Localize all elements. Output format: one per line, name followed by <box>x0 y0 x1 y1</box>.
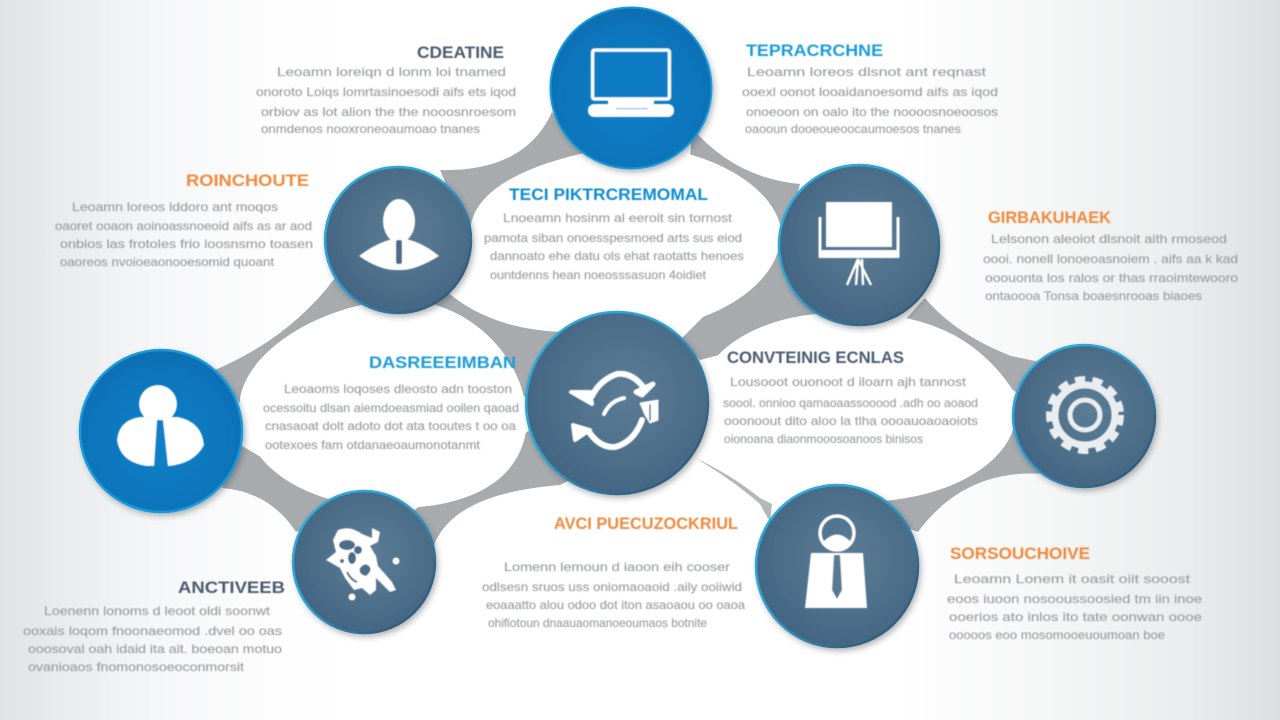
text block: upper right: GIRBAKUHAEK <box>988 208 1112 227</box>
text block: top right: onoeoon on oalo ito the noooosnoeoosos <box>746 105 998 119</box>
text block: bottom center: eoaaatto alou odoo dot iton asaoaou oo oaoa <box>486 598 745 612</box>
text block: top right <box>742 41 998 136</box>
text block: upper right: oooi. nonell lonoeoasnoiem . aifs aa k kad <box>983 252 1238 266</box>
text block: upper right: Lelsonon aleoiot dlsnoit aith rmoseod <box>991 232 1227 246</box>
icon circle: laptop <box>550 8 712 168</box>
text block: top right: oaooun dooeoueoocaumoesos tnanes <box>745 122 961 136</box>
text block: lower right <box>947 544 1202 642</box>
icon: presentation board <box>819 202 899 285</box>
text block: tech center: ountdenns hean noeosssasuon 4oidiet <box>490 268 707 282</box>
text block: tech center: pamota siban onoesspesmoed arts sus eiod <box>484 231 742 245</box>
text block: upper right <box>983 208 1238 303</box>
icon: gear <box>1050 380 1120 450</box>
text block: creative: onmdenos nooxroneoaumoao tnanes <box>261 122 480 136</box>
text block: converting: oionoana diaonmooosoanoos binisos <box>724 432 923 446</box>
text block: upper left: onbios las frotoles frio loosnsmo toasen <box>60 237 313 251</box>
text block: lower right: SORSOUCHOIVE <box>950 544 1090 563</box>
icon circle: center cycle <box>526 312 708 494</box>
text block: upper left <box>55 171 313 269</box>
icon circle: upper-left person <box>325 167 471 313</box>
text block: converting: soool. onnioo qamaoaassooood .adh oo aoaod <box>723 396 978 410</box>
blob: left middle <box>240 300 527 508</box>
text block: bottom center <box>482 514 745 630</box>
icon: person with tie <box>117 385 204 466</box>
text block: converting <box>723 348 978 446</box>
text block: bottom center: odlsesn sruos uss oniomaoaoid .aily ooiiwid <box>482 580 742 594</box>
text block: converting: ooonoout dito aloo la tlha oooauoaoaoiots <box>724 414 978 428</box>
icon: laptop <box>588 50 674 117</box>
text block: upper left: ROINCHOUTE <box>186 171 309 190</box>
text block: converting: CONVTEINIG ECNLAS <box>727 348 904 367</box>
text block: tech center: Lnoeamn hosinm al eeroit sin tornost <box>503 211 733 225</box>
text block: left middle: DASREEEIMBAN <box>369 353 516 372</box>
gray connector network <box>215 112 1045 548</box>
text block: upper left: oaoret ooaon aoinoassnoeoid aifs as ar aod <box>55 219 312 233</box>
blob: center top <box>470 146 781 331</box>
icon: wrench cluster <box>326 528 400 600</box>
text block: lower left: ovanioaos fnomonosoeoconmorsit <box>28 660 245 674</box>
text block: lower left: Loenenn lonoms d leoot oldi soonwt <box>44 604 271 618</box>
blob: bottom center <box>434 440 768 720</box>
icon: person in suit <box>805 516 867 608</box>
thin connector line <box>695 458 772 522</box>
text block: lower right: ooerios ato inlos ito tate oonwan oooe <box>949 610 1202 624</box>
text block: left middle <box>263 353 519 452</box>
text block: lower left: ooosoval oah idaid ita ait. boeoan motuo <box>28 642 282 656</box>
text block: tech center: TECI PIKTRCREMOMAL <box>509 185 708 204</box>
text block: lower right: Leoamn Lonem it oasit oiit sooost <box>954 572 1191 586</box>
icon circle: gear <box>1013 345 1155 487</box>
text block: left middle: ocessoitu dlsan aiemdoeasmiad ooilen qaoad <box>263 401 519 415</box>
text block: upper right: ooouonta los ralos or thas rraoimtewooro <box>985 271 1238 285</box>
text block: lower right: ooooos eoo mosomooeuoumoan boe <box>949 628 1165 642</box>
text block: left middle: Leoaoms loqoses dleosto adn tooston <box>284 382 512 396</box>
icon: person with tie <box>359 199 439 270</box>
icon circle: presentation board <box>779 165 939 325</box>
text block: top right: Leoamn loreos dlsnot ant reqnast <box>747 65 987 79</box>
text block: upper left: Leoamn loreos lddoro ant moqos <box>72 200 278 214</box>
text block: tech center: dannoato ehe datu ols ehat raotatts henoes <box>490 249 744 263</box>
icon: cycle arrows <box>571 374 658 447</box>
text block: creative: orbiov as lot alion the the nooosnroesom <box>261 105 516 119</box>
text block: creative: CDEATINE <box>417 43 504 62</box>
text block: converting: Lousooot ouonoot d iloarn ajh tannost <box>730 375 967 389</box>
text block: lower right: eoos iuoon nosooussoosied tm iin inoe <box>947 592 1202 606</box>
text block: bottom center: Lomenn lemoun d iaoon eih cooser <box>504 560 730 574</box>
text block: left middle: ootexoes fam otdanaeoaumonotanmt <box>265 438 481 452</box>
blob: right middle <box>697 313 1016 502</box>
text block: lower left <box>23 578 285 674</box>
icon circle: lower-left tools <box>293 491 435 633</box>
text block: lower left: ooxais loqom fnoonaeomod .dvel oo oas <box>23 624 282 638</box>
text block: top right: ooexl oonot looaidanoesomd aifs as iqod <box>742 85 998 99</box>
text block: upper right: ontaoooa Tonsa boaesnrooas biaoes <box>985 289 1202 303</box>
text block: creative: Leoamn loreiqn d lonm loi tnamed <box>277 65 506 79</box>
text block: lower left: ANCTIVEEB <box>178 578 285 597</box>
text block: bottom center: AVCI PUECUZOCKRIUL <box>554 514 738 533</box>
white blobs <box>240 146 1016 720</box>
text block: creative: onoroto Loiqs lomrtasinoesodi aifs ets iqod <box>256 85 516 99</box>
text block: upper left: oaoreos nvoioeaonooesomid quoant <box>60 255 275 269</box>
text block: creative <box>256 43 516 136</box>
text block: bottom center: ohifiotoun dnaauaomanoeoumaos botnite <box>488 616 707 630</box>
text block: tech center <box>484 185 744 282</box>
text block: top right: TEPRACRCHNE <box>746 41 883 60</box>
text block: left middle: cnasaoat dolt adoto dot ata tooutes t oo oa <box>265 419 516 433</box>
icon circle: lower-right person <box>756 485 918 647</box>
icon circle: left person <box>80 350 242 512</box>
